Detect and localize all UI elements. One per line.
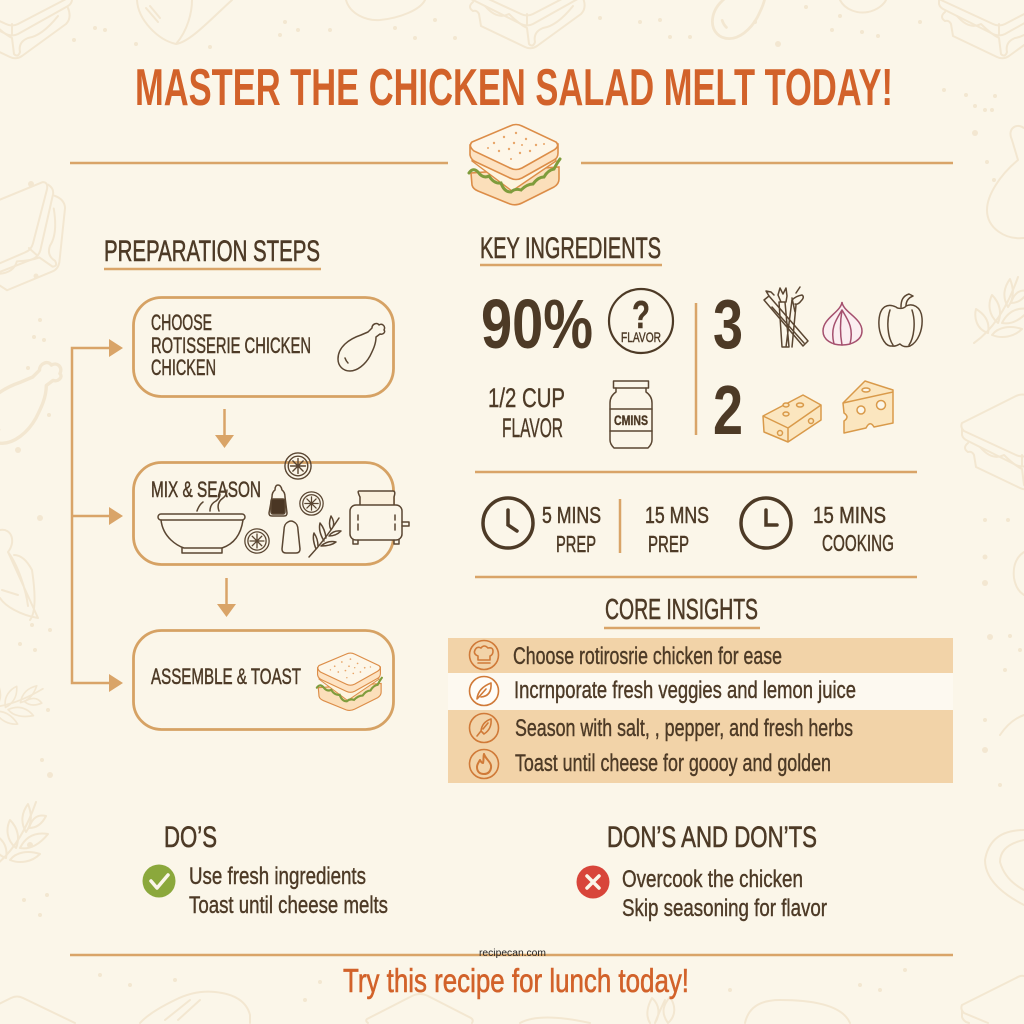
time: 15 mns prep: PREP	[648, 531, 689, 557]
icon: clock one	[483, 498, 533, 548]
icon: celery	[764, 287, 808, 347]
step 1 card: ROTISSERIE CHICKEN	[151, 333, 311, 358]
insight: veggies and lemon	[470, 676, 856, 706]
stat: 2: 2	[713, 371, 743, 449]
icon: bell pepper	[879, 294, 922, 347]
icon: chicken leg	[338, 324, 385, 371]
do items	[189, 863, 388, 919]
footer call to action: Try this recipe for lunch today!	[343, 962, 689, 999]
panel: preparation steps	[72, 235, 409, 730]
time: 15 mns prep: 15 MNS	[645, 502, 709, 528]
step 2 card: MIX & SEASON	[151, 477, 261, 502]
vertical divider	[619, 499, 621, 553]
flow connector with arrows	[72, 339, 123, 692]
time: 5 mins prep	[542, 502, 601, 557]
icon: lemon slice small	[245, 529, 269, 553]
label: flavor: FLAVOR	[502, 413, 563, 443]
panel: key ingredients	[480, 232, 922, 449]
insight: chicken for ease: Choose rotirosrie chicken for ease	[513, 643, 782, 670]
icon: flavor question badge: FLAVOR	[621, 329, 661, 345]
icon: cheese block	[763, 395, 821, 442]
heading: don'ts: DON’S AND DON’TS	[607, 821, 817, 854]
time: 15 mns prep	[645, 502, 709, 557]
step 1 card: CHOOSE	[151, 310, 212, 335]
heading: key ingredients: KEY INGREDIENTS	[480, 232, 661, 265]
icon: sandwich	[317, 653, 382, 710]
panel: core insights	[448, 594, 953, 783]
icon: jar: CMINS	[614, 412, 648, 428]
step 3 card	[134, 630, 394, 730]
footer divider	[70, 954, 953, 956]
divider	[475, 576, 917, 578]
icon: onion	[823, 302, 862, 345]
do items: Toast until cheese melts	[189, 892, 388, 919]
insight: seasoning: Season with salt, , pepper, and fresh herbs	[515, 715, 853, 742]
icon: cheese wedge	[843, 381, 893, 433]
insight band top	[448, 638, 953, 673]
insight band bottom	[448, 710, 953, 783]
time: 15 mins cooking: COOKING	[822, 530, 894, 556]
time: 15 mins cooking: 15 MINS	[813, 502, 886, 528]
do items: Use fresh ingredients	[189, 863, 366, 890]
icon: green check	[142, 864, 176, 898]
source credit: recipecan.com	[479, 948, 546, 959]
insight: toasting	[470, 750, 831, 778]
heading: preparation steps: PREPARATION STEPS	[104, 235, 320, 268]
step 2 card	[134, 453, 409, 564]
icon: red cross	[576, 866, 610, 898]
don't items	[622, 866, 827, 922]
panel: timing	[483, 498, 894, 557]
icon: herb sprig	[309, 516, 341, 557]
icon: pepper shaker	[269, 485, 287, 516]
arrow down 1	[215, 409, 234, 448]
icon: lemon slice	[300, 492, 323, 515]
insight band gap highlight	[448, 673, 953, 710]
icon: header sandwich	[469, 124, 560, 205]
don't items: Skip seasoning for flavor	[622, 895, 827, 922]
icon: salt shaker	[282, 521, 300, 553]
header divider left	[70, 162, 448, 164]
time: 15 mins cooking	[813, 502, 894, 556]
stat: 3: 3	[713, 285, 743, 363]
icon: lemon half	[285, 453, 311, 479]
heading: do's: DO’S	[164, 821, 217, 854]
vertical divider	[695, 303, 697, 435]
don't items: Overcook the chicken	[622, 866, 803, 893]
icon: flavor question badge	[609, 289, 673, 353]
time: 5 mins prep: 5 MINS	[542, 502, 601, 528]
heading: core insights: CORE INSIGHTS	[605, 594, 758, 626]
icon: clock two	[741, 498, 791, 548]
step 3 card: ASSEMBLE & TOAST	[151, 664, 301, 689]
icon: jar	[610, 381, 652, 448]
icon: steaming bowl	[158, 490, 245, 553]
icon: toaster	[350, 491, 409, 544]
panel: don'ts	[576, 821, 827, 922]
step 1 card	[134, 298, 394, 396]
divider	[475, 471, 917, 473]
header divider right	[581, 162, 953, 164]
arrow down 2	[217, 578, 236, 617]
step 1 card: CHICKEN	[151, 355, 216, 380]
icon: flavor question badge: ?	[632, 294, 650, 337]
insight: toasting: Toast until cheese for goooy and golden	[515, 750, 831, 777]
panel: do's	[142, 821, 388, 919]
insight: veggies and lemon: Incrnporate fresh veggies and lemon juice	[514, 677, 856, 704]
stat: 1/2 cup: 1/2 CUP	[488, 383, 565, 413]
insight: chicken for ease	[470, 640, 782, 670]
time: 5 mins prep: PREP	[556, 531, 596, 557]
stat: 90%: 90%	[481, 285, 593, 363]
insight: seasoning	[470, 714, 853, 742]
